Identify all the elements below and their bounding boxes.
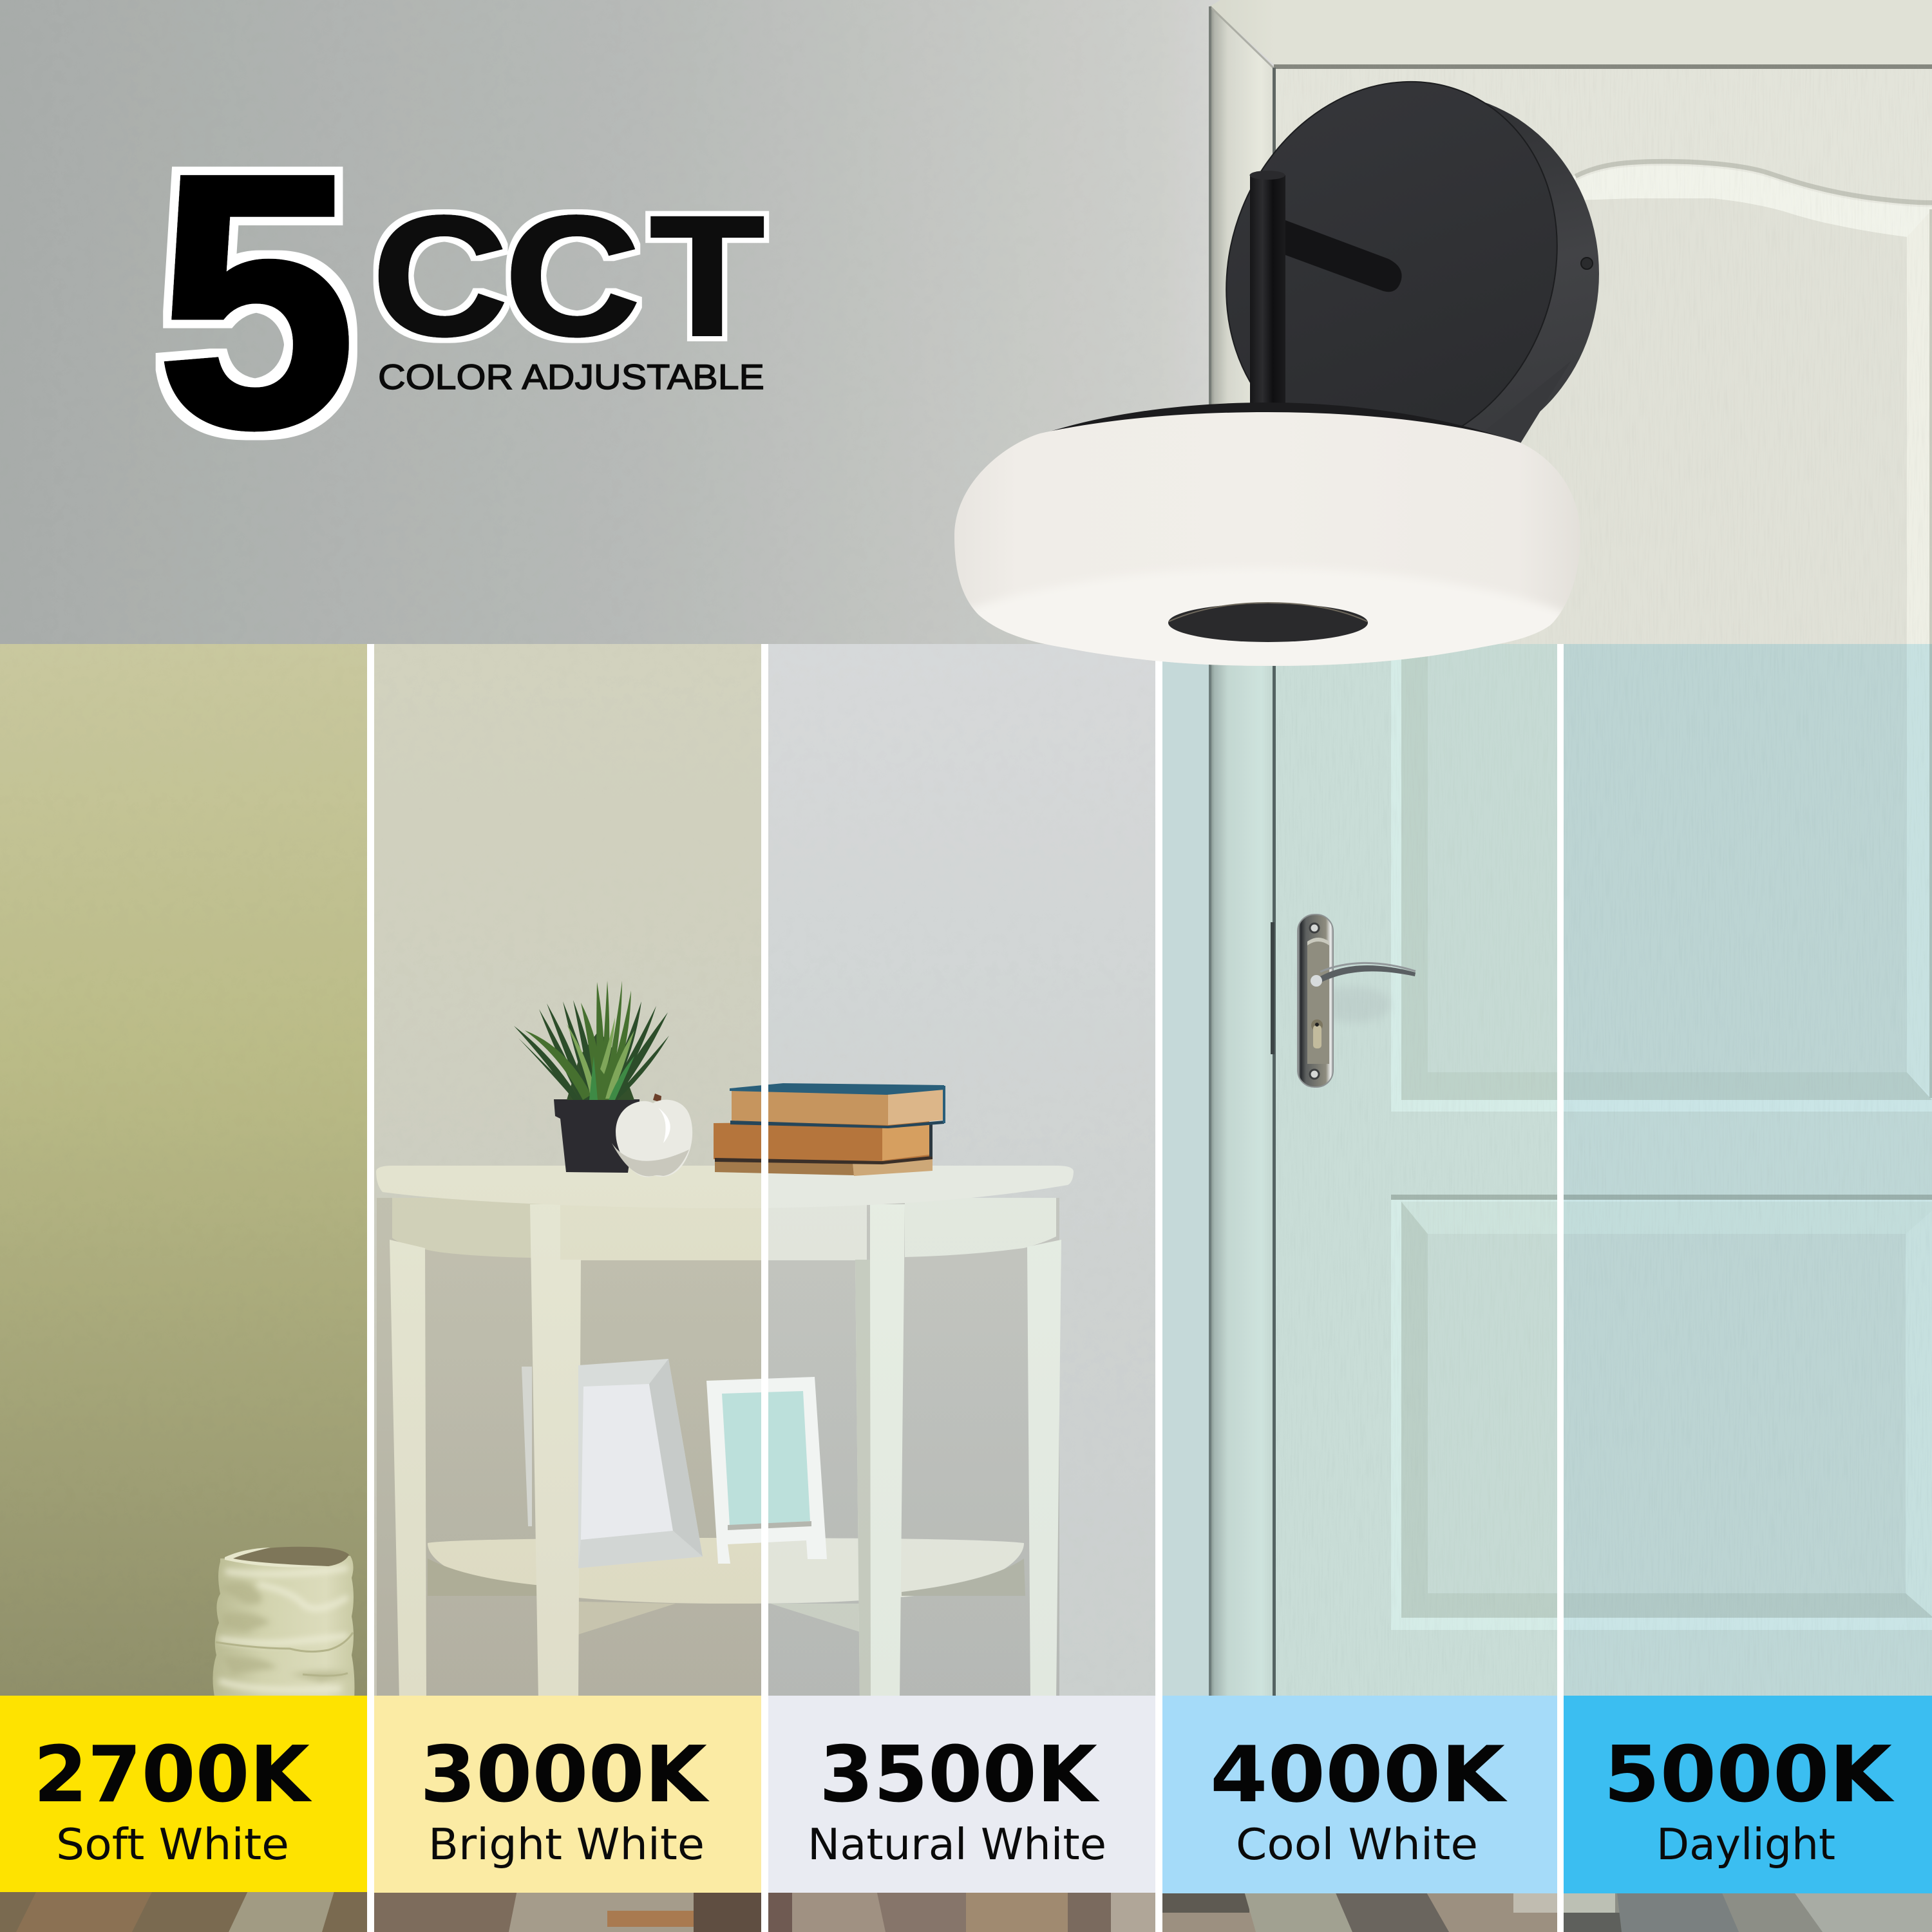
panel: 2700K Soft White: 2700K (33, 1730, 312, 1820)
panel: 3000K Bright White: Bright White (428, 1819, 705, 1870)
horizontal arm (1285, 220, 1402, 292)
lower shelf (428, 1538, 1025, 1634)
overlay: 3000K column tint (374, 644, 761, 1700)
panel: 3000K Bright White: 3000K (420, 1730, 710, 1820)
lower door panel (1391, 1195, 1932, 1630)
bottom book (715, 1160, 854, 1175)
panel: 5000K Daylight (1564, 1696, 1932, 1893)
table legs (390, 1204, 1061, 1700)
door wood grain (1275, 64, 1932, 1713)
plant pot (554, 1099, 639, 1173)
panel: 3500K Natural White (768, 1696, 1155, 1893)
panel: 5000K Daylight: 5000K (1604, 1730, 1895, 1820)
glass shade (954, 412, 1580, 666)
CCT letters: CCT (372, 181, 764, 372)
vase (213, 1547, 354, 1696)
table inner wall shadow (377, 1198, 1059, 1700)
table apron (392, 1198, 1056, 1260)
column dividers (367, 644, 1564, 1932)
wood floor (0, 1887, 1932, 1932)
panel: 3000K Bright White (374, 1696, 761, 1893)
big numeral 5: 5 (156, 99, 356, 502)
panel: 2700K Soft White (0, 1696, 367, 1892)
door handle (1271, 914, 1416, 1087)
panel: 4000K Cool White: 4000K (1210, 1730, 1508, 1820)
panel: 5000K Daylight: Daylight (1656, 1819, 1835, 1870)
console table scene (376, 1166, 1074, 1700)
subtitle: COLOR ADJUSTABLE (378, 357, 764, 397)
overlay: 4000K column tint (1162, 644, 1557, 1700)
panel: 2700K Soft White: Soft White (56, 1819, 289, 1870)
overlay: 2700K column tint (0, 644, 367, 1700)
title: 5 CCT (156, 99, 764, 502)
wall sconce lamp (954, 81, 1599, 666)
middle book (714, 1121, 931, 1161)
panel: 4000K Cool White: Cool White (1236, 1819, 1478, 1870)
top book (732, 1090, 888, 1125)
shade top disc (1040, 402, 1522, 444)
bottom disc (1168, 603, 1368, 642)
table top (376, 1166, 1074, 1208)
vertical stem (1249, 171, 1285, 407)
apple (612, 1094, 692, 1177)
overlay: 3500K column tint (768, 644, 1155, 1700)
overlay: 5000K column tint (1564, 644, 1932, 1700)
door arch moulding (1576, 162, 1932, 206)
panel: 3500K Natural White: 3500K (819, 1730, 1100, 1820)
back plate (1171, 32, 1612, 504)
panel: 4000K Cool White (1162, 1696, 1557, 1893)
panel: 3500K Natural White: Natural White (808, 1819, 1106, 1870)
picture frame: silver (522, 1359, 703, 1568)
overlay: top band neutral light (0, 0, 1932, 644)
picture frame: glass (706, 1377, 827, 1564)
shade lower rim (972, 578, 1561, 666)
upper door panel (1391, 162, 1932, 1112)
stack of books (714, 1083, 945, 1176)
plant grass (514, 981, 669, 1100)
door and frame (1162, 0, 1932, 1745)
